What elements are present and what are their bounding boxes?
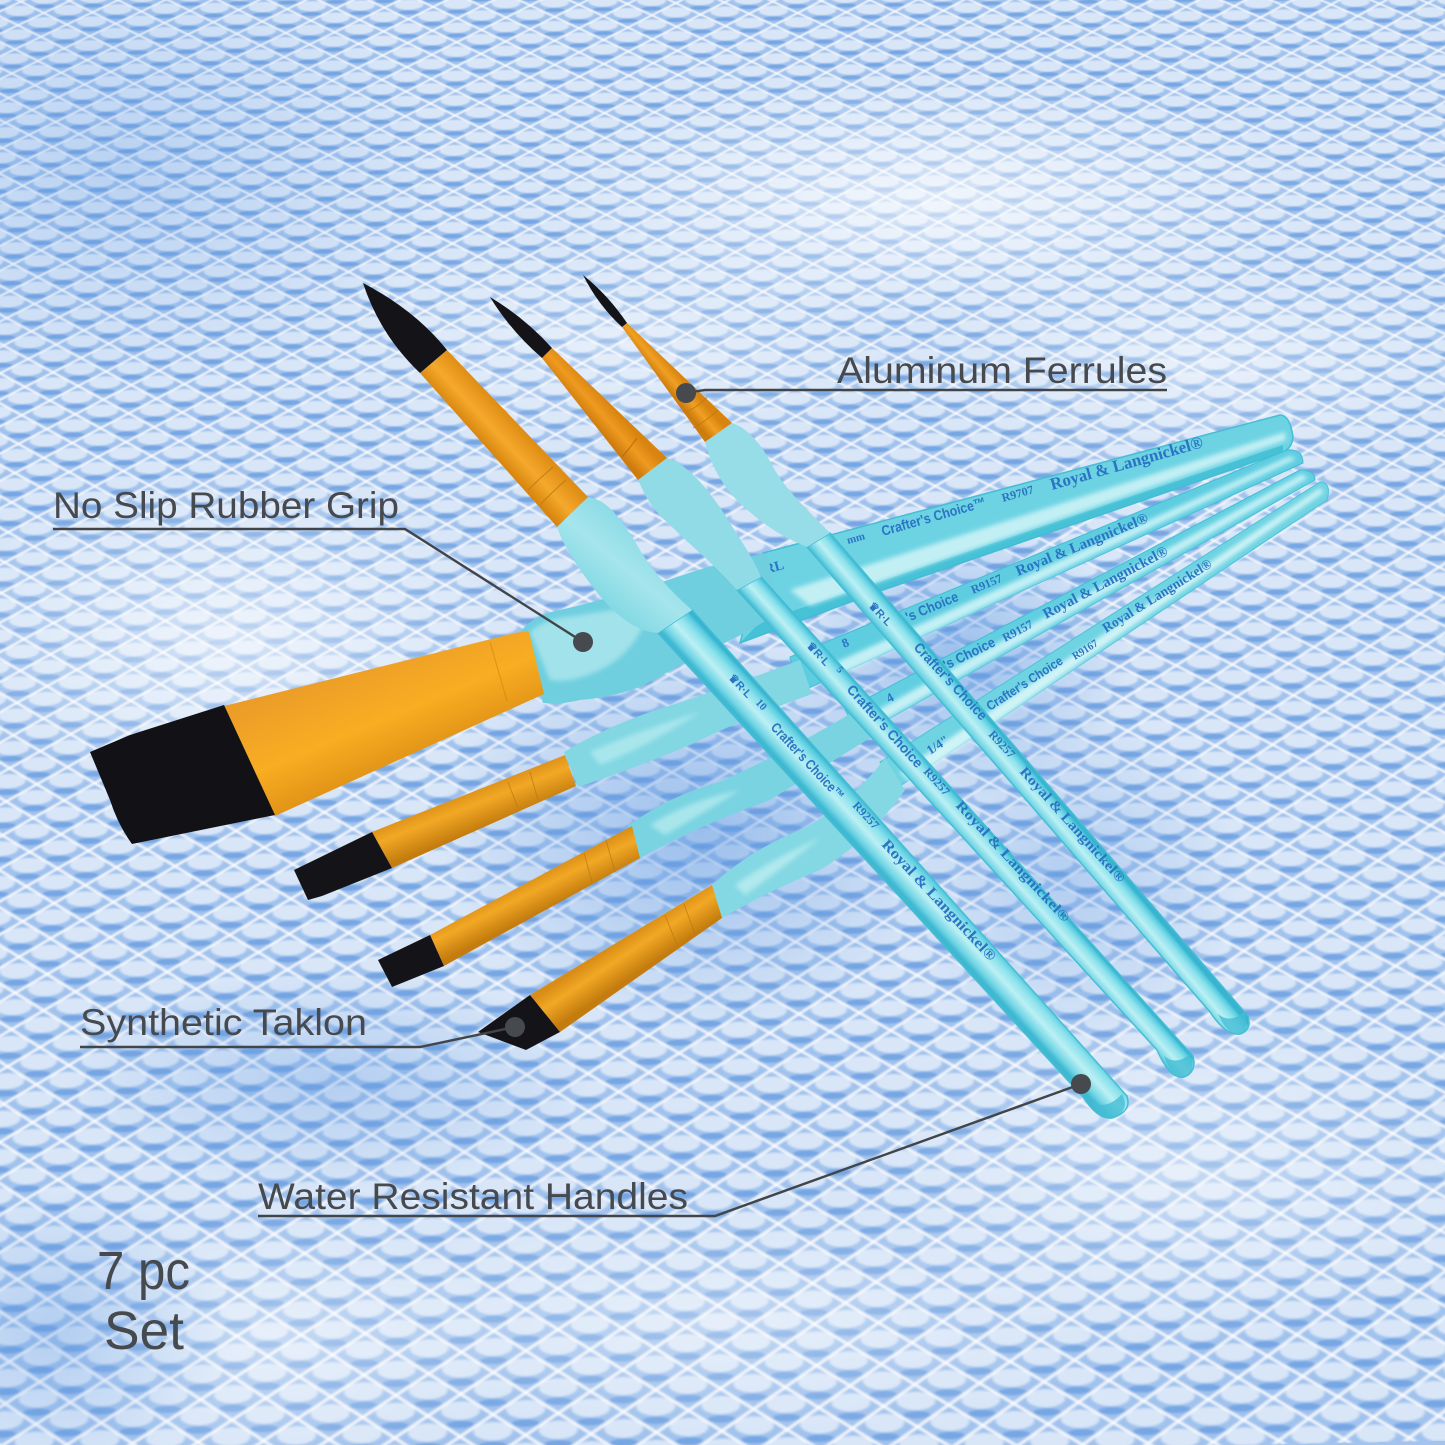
ferrule <box>372 755 576 868</box>
ferrule <box>542 348 667 480</box>
grip <box>712 758 905 918</box>
callout: Water Resistant Handles <box>258 1074 1091 1217</box>
handle <box>880 482 1328 786</box>
handle <box>807 533 1249 1034</box>
handle <box>845 470 1315 735</box>
grip <box>638 458 761 590</box>
callout: Synthetic Taklon: Synthetic Taklon <box>80 1002 367 1043</box>
brush 2: medium flat brush: 's Choice <box>903 588 961 625</box>
brush 2: medium flat brush: 8 <box>839 634 852 651</box>
handle tip <box>1218 1012 1247 1034</box>
callout: Aluminum Ferrules <box>676 350 1167 403</box>
brush 5: small round brush: ♛R·L <box>866 600 894 629</box>
handle tip <box>1164 1054 1192 1077</box>
handle <box>737 577 1194 1077</box>
ferrule <box>530 885 722 1032</box>
callout: No Slip Rubber Grip: No Slip Rubber Grip <box>53 485 399 526</box>
ferrule <box>622 323 732 442</box>
brush 5: small round brush: Crafter's Choice <box>911 639 991 723</box>
callout: Water Resistant Handles: Water Resistant Handles <box>258 1176 688 1217</box>
rubber grip <box>520 553 780 704</box>
handle <box>790 450 1303 692</box>
brush 7: large round brush: 10 <box>753 697 769 713</box>
brush 4: angled brush: 1/4" <box>923 732 952 758</box>
bristles <box>90 705 275 844</box>
bristles <box>378 935 444 987</box>
set count label: Set <box>104 1301 184 1361</box>
brush 6: medium round brush <box>490 297 1194 1077</box>
callout: Aluminum Ferrules: Aluminum Ferrules <box>837 350 1167 391</box>
callout: No Slip Rubber Grip <box>53 485 593 652</box>
handle: Crafter's Choice™ <box>879 494 988 539</box>
brush 6: medium round brush: Royal & Langnickel® <box>952 798 1073 926</box>
brush 2: medium flat brush: R9157 <box>969 571 1004 597</box>
grip <box>705 423 830 547</box>
brush 5: small round brush: R9257 <box>986 727 1018 761</box>
brush 6: medium round brush: 5 <box>834 665 845 676</box>
brush 1: large flat brush <box>90 415 1293 844</box>
brush 3: small flat brush: R9157 <box>1000 617 1035 645</box>
brush 4: angled brush: R9167 <box>1070 637 1101 663</box>
brush 3: small flat brush: 4 <box>883 689 897 706</box>
brush 6: medium round brush: ♛R·L <box>804 640 832 669</box>
brush 4: angled brush: Royal & Langnickel® <box>1100 557 1215 636</box>
brush 3: small flat brush <box>378 470 1315 987</box>
handle: R9707 <box>1000 482 1035 505</box>
brush 3: small flat brush: 's Choice <box>940 634 998 673</box>
brush 5: small round brush: Royal & Langnickel® <box>1016 765 1128 887</box>
set count label <box>97 1241 190 1361</box>
grip <box>564 660 812 787</box>
bristles <box>294 832 392 900</box>
bristles <box>490 297 552 358</box>
brush 7: large round brush: R9257 <box>850 798 882 832</box>
brush 4: angled brush <box>478 482 1328 1050</box>
handle: Royal & Langnickel® <box>1048 432 1205 494</box>
brush 4: angled brush: Crafter's Choice <box>983 653 1065 714</box>
handle: RL <box>763 558 786 578</box>
brush 7: large round brush: Royal & Langnickel® <box>878 837 999 965</box>
brush 7: large round brush: Crafter's Choice™ <box>768 719 848 803</box>
brush 7: large round brush <box>363 283 1128 1118</box>
grip <box>628 708 875 858</box>
handle: mm <box>846 530 866 547</box>
brush 2: medium flat brush <box>294 450 1303 900</box>
brush 2: medium flat brush: Royal & Langnickel® <box>1013 511 1151 580</box>
callout: Synthetic Taklon <box>80 1002 525 1047</box>
brush 6: medium round brush: Crafter's Choice <box>844 681 927 771</box>
bristles <box>583 275 627 327</box>
brush 3: small flat brush: Royal & Langnickel® <box>1040 544 1171 623</box>
brush 6: medium round brush: R9257 <box>921 765 953 798</box>
bristles <box>478 995 560 1050</box>
ferrule <box>420 350 588 527</box>
brush 7: large round brush: ♛R·L <box>726 672 754 701</box>
handle tip <box>1090 1094 1125 1118</box>
ferrule <box>224 632 544 816</box>
grip <box>557 497 692 633</box>
ferrule <box>430 826 640 966</box>
brush 5: small round brush <box>583 275 1249 1034</box>
handle <box>740 415 1293 643</box>
bristles <box>363 283 447 373</box>
set count label: 7 pc <box>97 1241 190 1301</box>
handle <box>658 610 1128 1118</box>
